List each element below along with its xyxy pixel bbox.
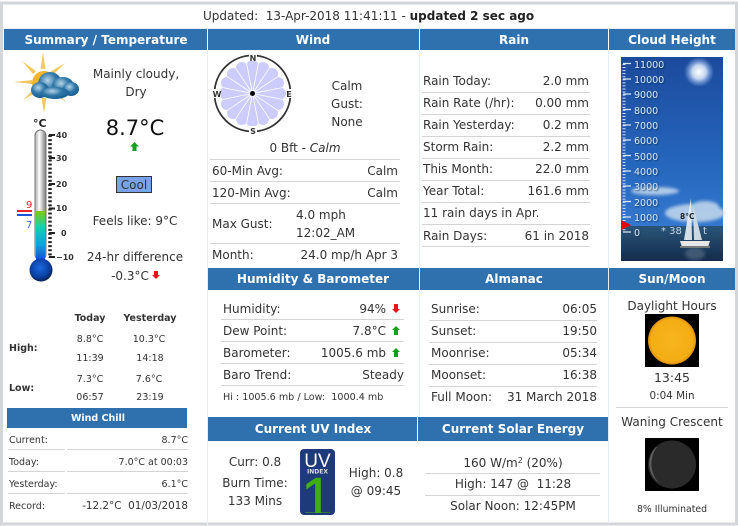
- almanac rows: Moonset:: [431, 368, 486, 382]
- uv high: High: 0.8: [349, 466, 403, 480]
- wind chill table: [7, 408, 188, 512]
- rain rows: Rain Today:: [423, 74, 491, 88]
- cloud height scale picture: 5000: [634, 152, 658, 163]
- high low table: Today: [75, 313, 106, 324]
- heading: wind: [208, 29, 419, 50]
- rain rows: 11 rain days in Apr.: [423, 206, 540, 220]
- wind rows: 4.0 mph: [296, 208, 346, 222]
- cloud height scale picture: [621, 57, 725, 261]
- humidity rows: [223, 302, 404, 403]
- humidity rows: Steady: [362, 368, 404, 382]
- rain rows: 22.0 mm: [535, 162, 589, 176]
- almanac rows: Sunrise:: [431, 302, 480, 316]
- thermometer: [17, 117, 74, 282]
- wind rows: 24.0 mp/h Apr 3: [300, 248, 398, 262]
- cloud height scale picture: 4000: [634, 167, 658, 178]
- uv badge: UV: [304, 451, 331, 472]
- solar rows: (20%): [523, 456, 563, 470]
- cloud height scale picture: 8°C: [680, 212, 695, 221]
- wind chill table: 8.7°C: [162, 435, 188, 446]
- thermometer: 0: [61, 229, 67, 238]
- solar rows: [450, 456, 576, 513]
- wind chill table: Yesterday:: [8, 479, 58, 490]
- cloud height scale picture: t: [703, 226, 707, 237]
- heading: cloud height: Cloud Height: [628, 33, 716, 47]
- panel: current uv index: [208, 417, 417, 515]
- feels like: Feels like: 9°C: [93, 214, 177, 228]
- rain rows: Rain Yesterday:: [423, 118, 515, 132]
- thermometer: 30: [56, 154, 68, 163]
- cloud height scale picture: 0: [634, 228, 640, 239]
- humidity rows: 1005.6 mb: [321, 346, 386, 360]
- heading: rain: Rain: [499, 33, 529, 47]
- moon phase label: Waning Crescent: [621, 415, 723, 429]
- heading: rain: [420, 29, 608, 50]
- heading: almanac: Almanac: [485, 272, 543, 286]
- panel: almanac: [420, 268, 608, 404]
- heading: cloud height: [609, 29, 735, 50]
- rain rows: 161.6 mm: [527, 184, 589, 198]
- thermometer: °C: [33, 117, 47, 130]
- high low table: 10.3°C: [133, 334, 166, 345]
- solar rows: Solar Noon: 12:45PM: [450, 499, 576, 513]
- wind speed text: Gust:: [331, 97, 363, 111]
- wind rows: 12:02_AM: [296, 226, 355, 240]
- rain rows: Rain Rate (/hr):: [423, 96, 514, 110]
- uv high: [349, 466, 403, 498]
- thermometer: 10: [56, 204, 68, 213]
- 24 hour difference: -0.3°C: [111, 269, 149, 283]
- wind rows: Max Gust:: [212, 217, 273, 231]
- high low table: High:: [9, 343, 38, 354]
- panel: summary and temperature: [4, 29, 207, 512]
- wind rose compass: [213, 53, 293, 136]
- rain rows: Rain Days:: [423, 229, 487, 243]
- wind rose compass: N: [250, 54, 256, 63]
- rain rows: Storm Rain:: [423, 140, 493, 154]
- daylight hours label: Daylight Hours: [627, 299, 717, 313]
- updated status line: Updated: 13-Apr-2018 11:41:11 - updated 2 sec ago: [203, 9, 534, 23]
- wind chill table: Today:: [8, 457, 39, 468]
- humidity rows: 7.8°C: [353, 324, 386, 338]
- heading: wind chill: Wind Chill: [71, 413, 125, 424]
- high low table: 14:18: [136, 353, 164, 364]
- cloud height scale picture: 10000: [634, 75, 664, 86]
- wind chill table: Record:: [9, 501, 45, 512]
- thermometer: 7: [26, 220, 32, 231]
- uv text left: Curr: 0.8: [229, 455, 281, 469]
- heading: sun moon: [609, 268, 735, 290]
- wind rows: 120-Min Avg:: [212, 186, 291, 200]
- humidity rows: Humidity:: [223, 302, 281, 316]
- thermometer: 20: [56, 180, 68, 189]
- panel: sun and moon: [609, 268, 735, 515]
- cloud height scale picture: 8000: [634, 106, 658, 117]
- uv text left: [222, 455, 288, 508]
- cloud height scale picture: 6000: [634, 136, 658, 147]
- panel: rain: [420, 29, 608, 246]
- almanac rows: 05:34: [562, 346, 597, 360]
- rain rows: This Month:: [422, 162, 493, 176]
- cloud height scale picture: * 38: [661, 226, 682, 237]
- heading: summary: [4, 29, 207, 50]
- almanac rows: 16:38: [562, 368, 597, 382]
- cloud height scale picture: 2000: [634, 198, 658, 209]
- wind speed text: None: [331, 115, 363, 129]
- wind speed text: [331, 79, 363, 129]
- humidity rows: Baro Trend:: [223, 368, 291, 382]
- badge: cool: [116, 176, 152, 192]
- icon: green up arrow: [130, 142, 139, 151]
- rain rows: 2.0 mm: [543, 74, 589, 88]
- heading: wind chill: [7, 408, 187, 428]
- wind rows: Month:: [212, 248, 254, 262]
- cloud height scale picture: 1000: [634, 213, 658, 224]
- heading: uv: Current UV Index: [255, 422, 371, 436]
- solar rows: 160 W/m: [463, 456, 518, 470]
- high low table: 7.6°C: [136, 374, 163, 385]
- uv badge: INDEX: [307, 468, 328, 476]
- cloud height scale picture: 7000: [634, 121, 658, 132]
- wind rose compass: E: [286, 90, 292, 99]
- daylight duration: [649, 370, 695, 402]
- rain rows: 61 in 2018: [525, 229, 589, 243]
- rain rows: 2.2 mm: [543, 140, 589, 154]
- thermometer: 40: [56, 131, 68, 140]
- almanac rows: 31 March 2018: [507, 390, 597, 404]
- high low table: 8.8°C: [77, 334, 104, 345]
- wind speed text: Calm: [332, 79, 362, 93]
- heading: summary: Summary / Temperature: [24, 33, 188, 47]
- condition text: [93, 67, 179, 99]
- 24 hour difference: 24-hr difference: [87, 250, 183, 264]
- 24 hour difference: [87, 250, 183, 283]
- solar rows: High: 147 @ 11:28: [455, 477, 571, 491]
- solar rows: 2: [518, 456, 523, 465]
- wind rows: Calm: [367, 186, 398, 200]
- illumination text: 8% Illuminated: [637, 504, 707, 515]
- current temperature: 8.7°C: [106, 116, 164, 140]
- badge: cool: Cool: [121, 178, 147, 192]
- sun image: [645, 314, 699, 367]
- icon: sun behind cloud: [14, 52, 79, 113]
- almanac rows: 19:50: [562, 324, 597, 338]
- wind rows: Calm: [367, 164, 398, 178]
- heading: uv: [208, 417, 417, 441]
- humidity rows: Hi : 1005.6 mb / Low: 1000.4 mb: [223, 392, 383, 403]
- thermometer: −10: [56, 253, 74, 262]
- high low table: [9, 313, 177, 403]
- rain rows: [422, 74, 589, 243]
- heading: humidity: [208, 268, 419, 290]
- rain rows: 0.00 mm: [535, 96, 589, 110]
- wind chill table: Current:: [9, 435, 48, 446]
- panel: humidity and barometer: [208, 268, 419, 403]
- wind chill table: 7.0°C at 00:03: [119, 457, 188, 468]
- cloud height scale picture: 9000: [634, 90, 658, 101]
- almanac rows: Sunset:: [431, 324, 476, 338]
- high low table: Low:: [9, 383, 34, 394]
- daylight duration: 0:04 Min: [649, 390, 695, 402]
- condition text: Mainly cloudy,: [93, 67, 179, 81]
- panel: current solar energy: [418, 417, 608, 513]
- humidity rows: 94%: [359, 302, 386, 316]
- wind chill table: -12.2°C 01/03/2018: [82, 500, 188, 512]
- rain rows: 0.2 mm: [543, 118, 589, 132]
- thermometer: 9: [26, 200, 32, 211]
- humidity rows: Barometer:: [223, 346, 291, 360]
- uv high: @ 09:45: [351, 484, 401, 498]
- heading: solar: Current Solar Energy: [442, 422, 584, 436]
- wind rows: [212, 164, 398, 262]
- moon image: [645, 438, 699, 491]
- almanac rows: Full Moon:: [431, 390, 492, 404]
- wind rows: 60-Min Avg:: [212, 164, 283, 178]
- panel: wind: [208, 29, 419, 262]
- heading: almanac: [420, 268, 608, 290]
- almanac rows: Moonrise:: [431, 346, 490, 360]
- wind rose compass: W: [213, 90, 222, 99]
- high low table: Yesterday: [123, 313, 177, 324]
- heading: wind: Wind: [296, 33, 330, 47]
- uv text left: 133 Mins: [228, 494, 282, 508]
- high low table: 7.3°C: [77, 374, 104, 385]
- wind chill table: 6.1°C: [162, 479, 188, 490]
- heading: humidity: Humidity & Barometer: [237, 272, 389, 286]
- rain rows: Year Total:: [422, 184, 484, 198]
- uv text left: Burn Time:: [222, 476, 288, 490]
- uv badge: [300, 449, 335, 515]
- humidity rows: Dew Point:: [223, 324, 287, 338]
- beaufort text: 0 Bft - Calm: [269, 141, 341, 155]
- almanac rows: 06:05: [562, 302, 597, 316]
- high low table: 11:39: [76, 353, 104, 364]
- wind rose compass: S: [250, 127, 256, 136]
- heading: solar: [418, 417, 608, 441]
- daylight duration: 13:45: [654, 370, 690, 385]
- cloud height scale picture: 11000: [634, 60, 664, 71]
- heading: sun moon: Sun/Moon: [638, 272, 706, 286]
- cloud height scale picture: 3000: [634, 182, 658, 193]
- panel: cloud height: [609, 29, 735, 261]
- high low table: 23:19: [136, 392, 164, 403]
- almanac rows: [431, 302, 597, 404]
- high low table: 06:57: [76, 392, 104, 403]
- condition text: Dry: [125, 85, 147, 99]
